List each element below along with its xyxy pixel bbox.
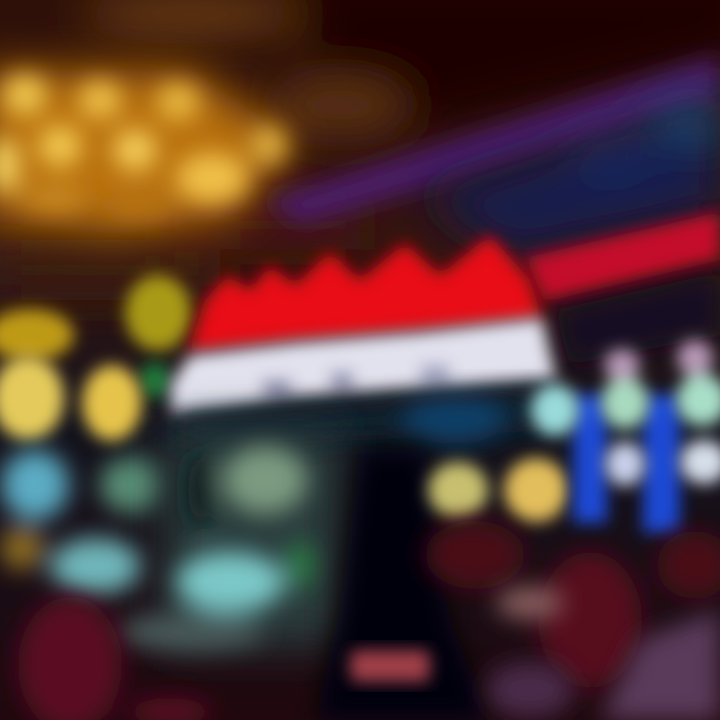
yellow-green sign — [125, 275, 191, 351]
red sign at bottom centre — [350, 650, 430, 682]
left slot machines — [0, 356, 164, 594]
shadow under banner — [180, 388, 550, 450]
center slot machine — [115, 430, 340, 650]
dark band below red — [555, 272, 720, 365]
white banner — [170, 318, 556, 415]
green accent — [140, 362, 170, 398]
crowd in foreground — [18, 521, 720, 720]
ceiling — [0, 0, 720, 300]
dark silhouette — [315, 450, 490, 720]
chandelier — [0, 70, 295, 235]
red right band — [525, 212, 720, 302]
blue upper right — [420, 100, 720, 255]
right blue machines — [531, 340, 720, 533]
yellow sign left — [0, 309, 74, 361]
purple ceiling band — [265, 55, 720, 225]
red banner — [188, 235, 542, 352]
yellow machine lights — [428, 458, 568, 522]
